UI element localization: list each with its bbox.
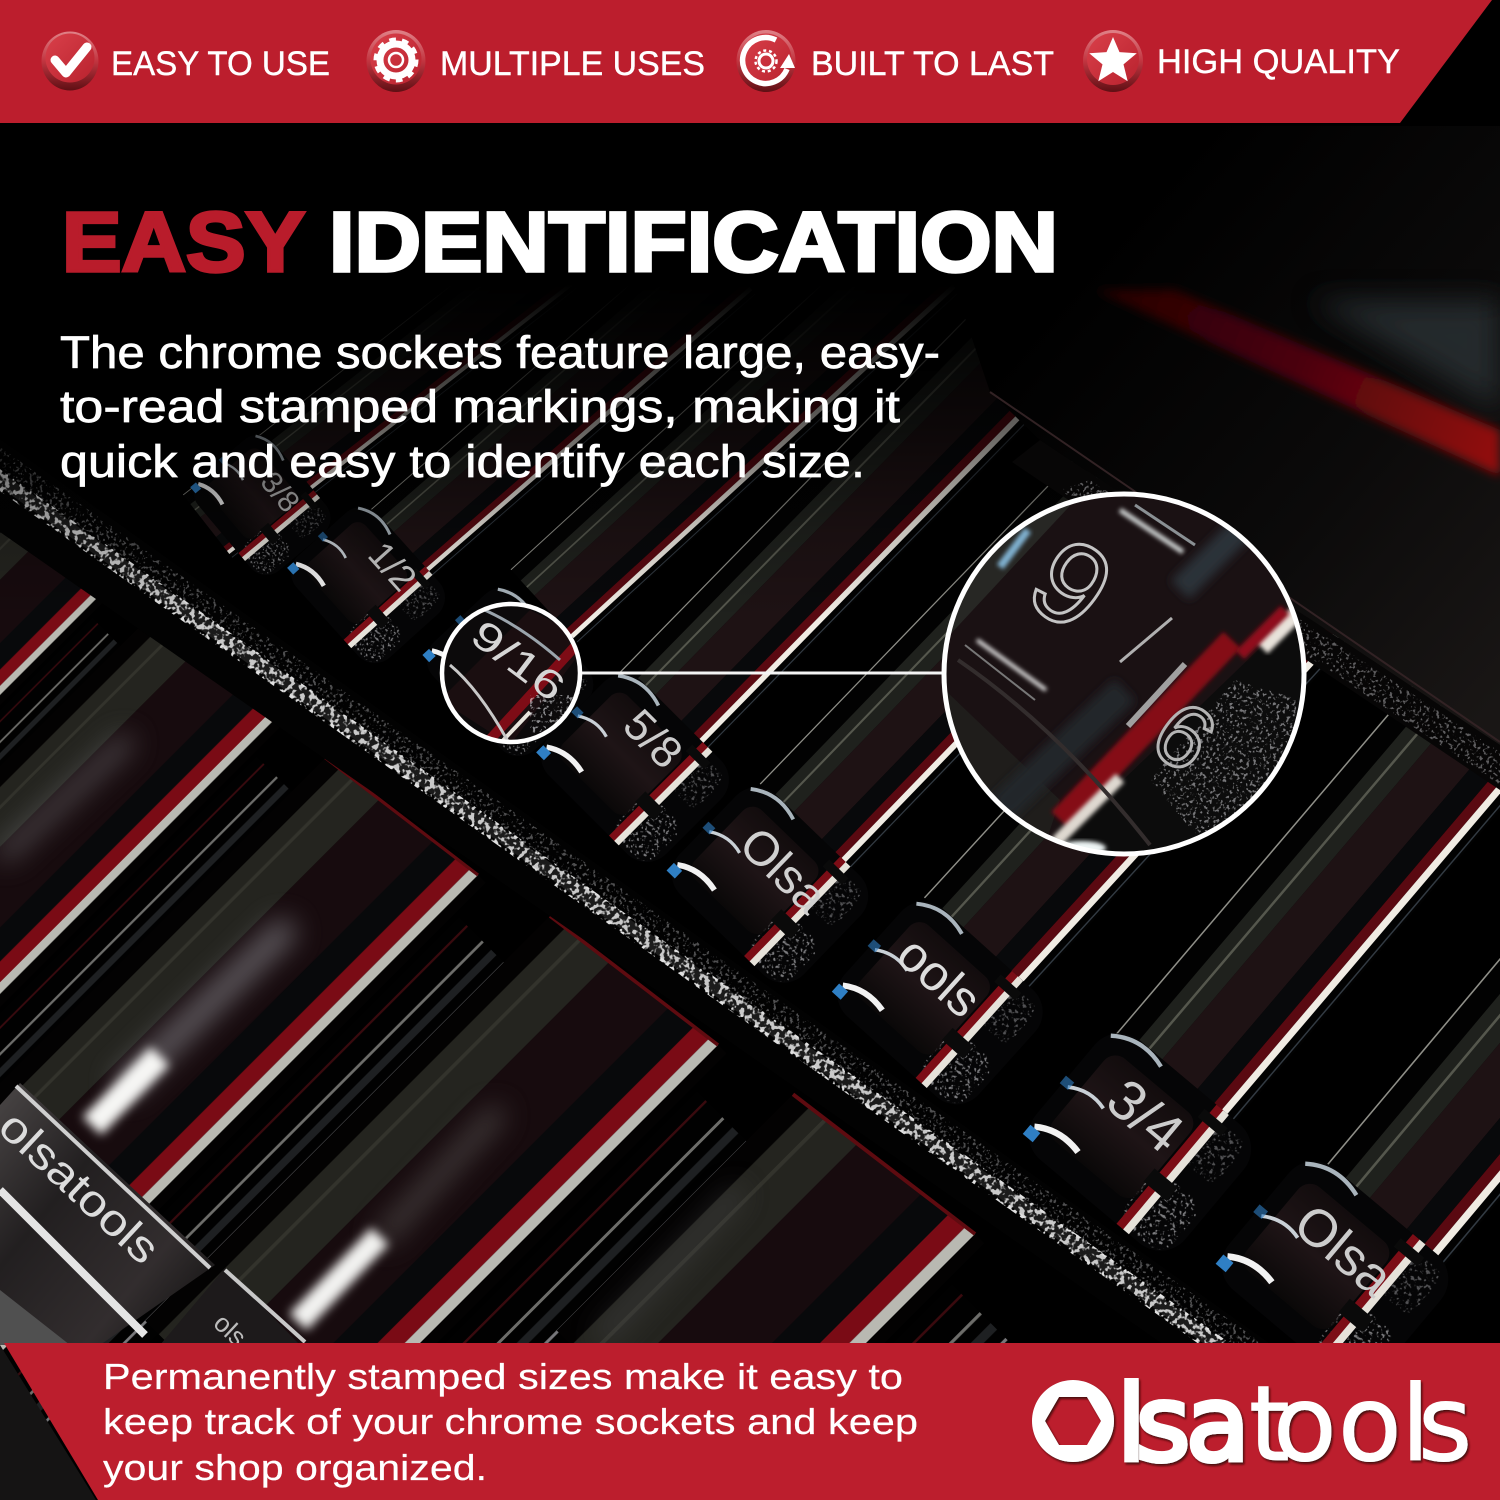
icon: gear badge: [366, 30, 426, 92]
intro paragraph: The chrome sockets feature large, easy-: [60, 327, 940, 378]
small magnifier circle on 9/16 marking: 9/16: [463, 612, 573, 710]
solid black behind banner: [0, 0, 1500, 126]
socket collars with stamped sizes: [184, 426, 1462, 1396]
background tray at upper right: [900, 124, 1500, 790]
bottom banner: [0, 1343, 1500, 1500]
socket collars with stamped sizes: 3/8: [254, 466, 306, 519]
socket collars with stamped sizes: 1/2: [360, 534, 425, 599]
intro paragraph: to-read stamped markings, making it: [60, 381, 901, 432]
small magnifier circle on 9/16 marking: [440, 604, 590, 752]
label: easy to use: EASY TO USE: [111, 45, 330, 83]
logo: Olsatools: lsa: [1117, 1363, 1250, 1485]
magnifier connector line: [580, 672, 946, 674]
socket collars with stamped sizes: Olsa: [1283, 1193, 1404, 1308]
socket collars with stamped sizes: Olsa: [729, 817, 837, 924]
large magnifier circle: [940, 490, 1310, 860]
socket collars with stamped sizes: 5/8: [614, 700, 692, 778]
footer text: [103, 1356, 918, 1488]
lower row of large sockets: [0, 501, 1058, 1500]
upper row of sockets: [183, 202, 1500, 1277]
label: high quality: HIGH QUALITY: [1157, 43, 1400, 81]
icon: star badge: [1083, 30, 1143, 92]
bottom-left collars with brand stamp: [0, 1083, 305, 1352]
bottom-left collars with brand stamp: ols: [208, 1307, 253, 1352]
label: built to last: BUILT TO LAST: [811, 45, 1054, 83]
logo: Olsatools: [1032, 1363, 1472, 1485]
pouch rail: [0, 432, 1300, 1440]
top fade to black: [0, 0, 1500, 620]
heading: EASY: [62, 195, 305, 289]
socket collars with stamped sizes: 3/4: [1095, 1066, 1196, 1165]
footer text: your shop organized.: [103, 1447, 487, 1488]
intro paragraph: [60, 327, 940, 487]
footer text: Permanently stamped sizes make it easy to: [103, 1356, 903, 1397]
heading: [62, 195, 1058, 289]
glare on sockets: [0, 738, 740, 1340]
icon: built to last badge: [736, 30, 796, 92]
large magnifier circle: 6: [1134, 682, 1233, 792]
icon: check mark badge: [42, 32, 98, 90]
top banner: [0, 0, 1492, 123]
footer text: keep track of your chrome sockets and keep: [103, 1401, 918, 1442]
intro paragraph: quick and easy to identify each size.: [60, 436, 865, 487]
label: multiple uses: MULTIPLE USES: [440, 45, 705, 83]
socket collars with stamped sizes: ools: [886, 925, 992, 1028]
large magnifier circle: 9: [1006, 512, 1137, 658]
logo: Olsatools: tools: [1249, 1363, 1472, 1485]
heading: IDENTIFICATION: [329, 195, 1058, 289]
